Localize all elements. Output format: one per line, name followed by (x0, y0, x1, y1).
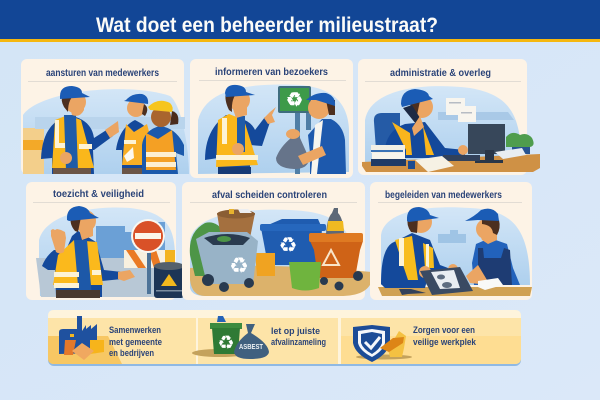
panel: aansturen van medewerkers (21, 59, 189, 174)
book stack (371, 145, 406, 166)
person: beheerder pointing (205, 85, 276, 174)
brown basket (217, 209, 255, 238)
scene background (23, 89, 189, 174)
text: veilige werkplek (413, 325, 477, 348)
apprentice (465, 209, 520, 290)
scene background (39, 207, 175, 296)
tool (399, 289, 426, 295)
scene background (365, 86, 521, 165)
icon: factory and handshake (59, 316, 104, 360)
panel: toezicht & veiligheid (26, 182, 184, 300)
panel: administratie & overleg (358, 59, 540, 175)
bag (276, 138, 309, 169)
cardboard box (255, 253, 275, 276)
scene background (190, 210, 355, 296)
heading: aansturen: aansturen van medewerkers (46, 68, 159, 79)
heading: toezicht: toezicht & veiligheid (53, 189, 144, 200)
documents (415, 156, 454, 172)
grey container (196, 232, 258, 292)
heading: afval scheiden: afval scheiden controleren (212, 190, 327, 201)
panel: bottom strip (48, 310, 521, 366)
icon: recycling bin and asbestos bag: ♻ (217, 333, 235, 354)
icon: recycling bin and asbestos bag (192, 316, 269, 359)
chair (374, 113, 400, 150)
text: veilige werkplek: veilige werkplek (413, 337, 477, 348)
text: samenwerken: Samenwerken (109, 325, 161, 336)
plant (506, 133, 534, 147)
scene background (198, 84, 349, 174)
panel: informeren van bezoekers (190, 59, 353, 178)
title: Wat doet een beheerder milieustraat? (96, 13, 438, 37)
blue recycling bin: ♻ (279, 234, 297, 257)
panel: afval scheiden controleren (182, 182, 372, 300)
text: afvalinzameling (271, 326, 326, 348)
desk (362, 154, 540, 172)
orange bin (309, 233, 363, 290)
device (420, 267, 473, 295)
icon: recycling bin and asbestos bag: ASBEST (239, 342, 263, 351)
heading: informeren: informeren van bezoekers (215, 67, 328, 78)
blue recycling bin (260, 219, 326, 265)
sign: recycling (278, 86, 311, 174)
desk (378, 287, 532, 296)
person: stop gesture (42, 206, 135, 298)
text: veilige werkplek: Zorgen voor een (413, 325, 475, 336)
text: samenwerken: met gemeente (109, 337, 162, 348)
text: samenwerken: en bedrijven (109, 348, 154, 359)
warning drum (154, 262, 184, 298)
text: samenwerken (109, 325, 162, 359)
barrier (124, 250, 175, 268)
sign: recycling: ♻ (286, 90, 303, 111)
no entry sign (131, 219, 165, 294)
bush (190, 222, 224, 276)
text: afvalinzameling: let op juiste (271, 326, 320, 337)
person: on phone (384, 89, 468, 158)
green bucket (289, 262, 321, 290)
person: visitor (286, 93, 346, 174)
person: worker in blue cap (116, 94, 154, 174)
hazard canister (326, 208, 344, 234)
person: manager (41, 86, 119, 174)
paper notes (446, 98, 476, 122)
grey container: ♻ (229, 253, 249, 278)
panel: begeleiden van medewerkers (370, 182, 532, 300)
person: worker in yellow hard hat (142, 101, 184, 174)
text: afvalinzameling: afvalinzameling (271, 337, 326, 348)
icon: shield and glove (353, 325, 412, 362)
mentor (381, 207, 458, 288)
heading: administratie: administratie & overleg (390, 68, 491, 79)
heading: begeleiden: begeleiden van medewerkers (385, 190, 502, 201)
monitor and keyboard (443, 124, 505, 163)
scene background (381, 207, 530, 285)
title banner (0, 0, 600, 42)
